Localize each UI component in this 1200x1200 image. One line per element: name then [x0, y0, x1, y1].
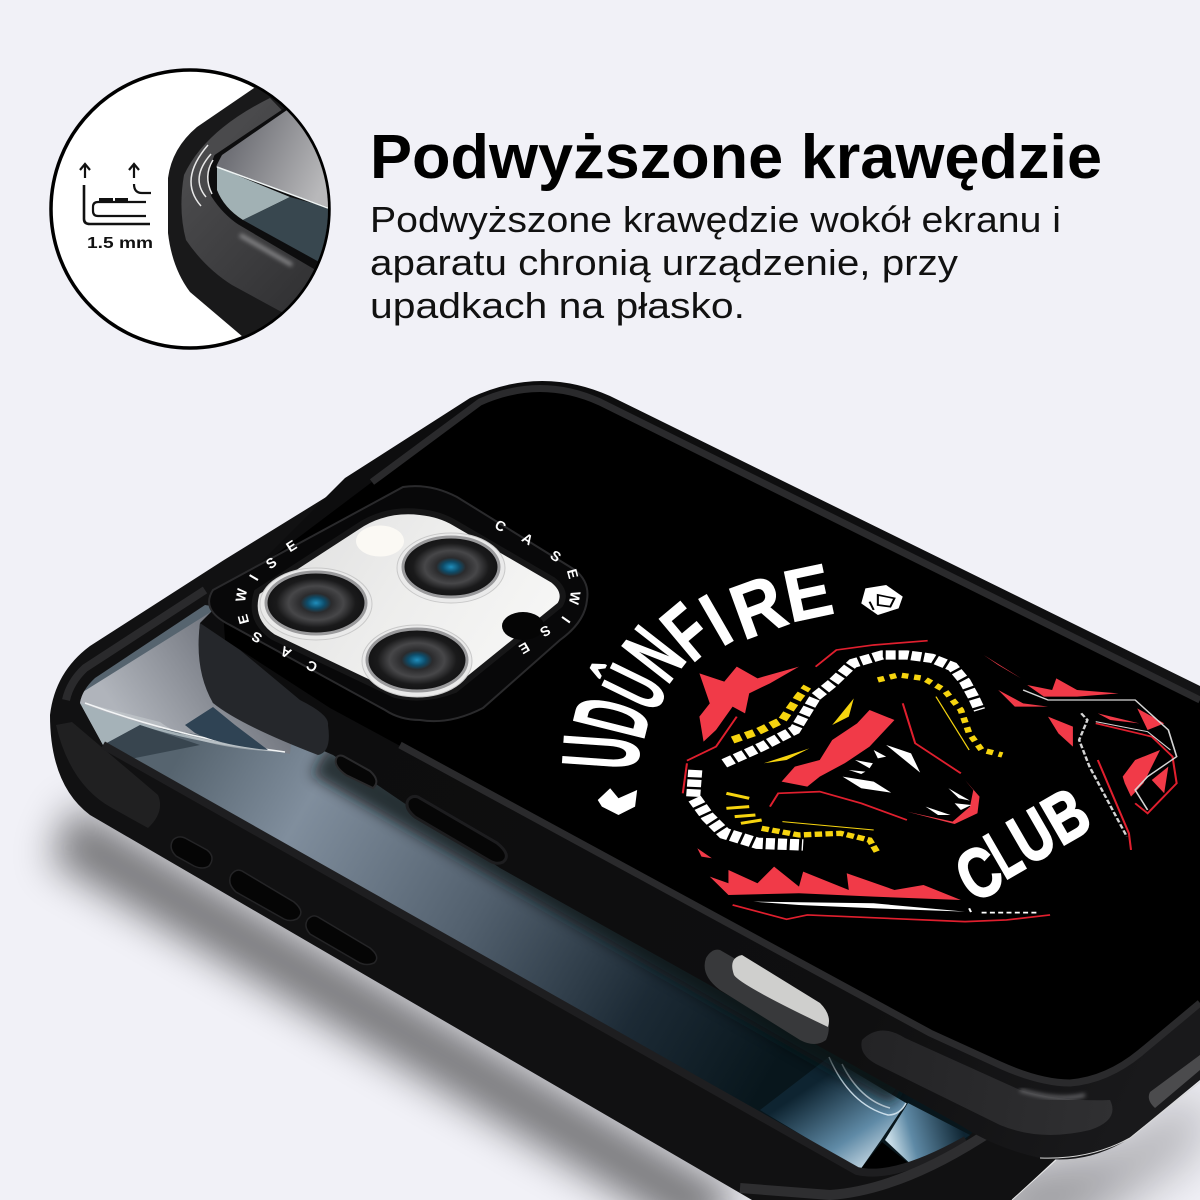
CASEWISE ring lettering: A [277, 643, 294, 662]
yellow scales [726, 675, 1002, 853]
CASEWISE ring lettering: E [564, 567, 582, 580]
dice emblem [861, 585, 903, 615]
camera window [255, 511, 563, 698]
face rim [372, 388, 1200, 1083]
CASEWISE ring lettering: C [492, 516, 509, 535]
lens bottom [362, 625, 472, 697]
right side light edge [1040, 1082, 1200, 1158]
front phone case with design [199, 381, 1200, 1160]
CASEWISE ring lettering: I [246, 572, 262, 583]
crown mark [598, 788, 637, 815]
CASEWISE ring lettering: E [283, 536, 300, 555]
artwork: UDÛNFIRE lettering: D [552, 688, 674, 747]
inset: case corner photo [168, 88, 328, 336]
artwork: UDÛNFIRE lettering: I [687, 578, 745, 661]
back phone button: volume down [306, 916, 377, 964]
back phone rim highlight [103, 745, 966, 1173]
artwork: CLUB lettering: L [974, 814, 1035, 894]
lidar hole [502, 612, 544, 640]
label: 1.5 mm: 1.5 mm [87, 235, 153, 252]
front phone shadow on screen [320, 760, 900, 1090]
CASEWISE ring lettering: C [303, 657, 320, 676]
artwork: CLUB lettering: C [944, 830, 1015, 917]
back phone button: volume up [230, 870, 301, 920]
CASEWISE ring lettering: I [558, 614, 574, 626]
description text: aparatu chronią urządzenie, przy [370, 242, 958, 283]
lens right [397, 533, 505, 603]
description text: Podwyższone krawędzie wokół ekranu i [370, 199, 1061, 240]
corner highlight [1020, 1090, 1085, 1098]
back phone port edge [1012, 1160, 1056, 1200]
artwork: UDÛNFIRE lettering: Û [584, 652, 686, 722]
white vertebrae [693, 655, 980, 845]
artwork: UDÛNFIRE lettering: E [777, 549, 839, 639]
callout: raised edge inset circle [51, 60, 340, 360]
back phone lower corner sheen [740, 1135, 985, 1195]
sword tip [969, 908, 1038, 913]
artwork: UDÛNFIRE lettering [539, 549, 839, 772]
right side speaker detail [1149, 1055, 1200, 1108]
artwork: CLUB lettering [944, 773, 1103, 917]
artwork: dragon emblem [598, 585, 1177, 922]
CASEWISE ring lettering: W [232, 586, 250, 603]
back phone screen [80, 605, 972, 1168]
silver button [732, 955, 829, 1027]
silver button recess [705, 950, 829, 1044]
back phone top rim sheen [66, 590, 205, 700]
icon: white signal arcs [191, 145, 213, 206]
red flames around the dragon [697, 655, 1168, 900]
dragon teeth [843, 745, 971, 815]
phone shadow: right corner [960, 1090, 1200, 1200]
CASEWISE ring lettering: S [537, 622, 554, 641]
artwork: CLUB lettering: B [1030, 773, 1103, 860]
artwork: UDÛNFIRE lettering: F [645, 587, 729, 677]
CASEWISE ring lettering: S [263, 554, 280, 572]
title: Podwyższone krawędzie [370, 123, 1102, 192]
camera bump base [199, 623, 329, 755]
corner carbon patch [861, 1030, 1112, 1135]
red linework [683, 641, 1177, 922]
phone shadow: lower edge [50, 805, 740, 1200]
front phone bezel [199, 381, 1200, 1160]
description text [370, 199, 1061, 326]
CASEWISE ring lettering: S [249, 628, 265, 647]
snake and dagger [1023, 690, 1177, 837]
artwork: UDÛNFIRE lettering: N [605, 611, 703, 697]
back phone case [50, 470, 1060, 1200]
CASEWISE ring lettering: E [234, 613, 252, 626]
sword [753, 902, 965, 912]
artwork: UDÛNFIRE lettering: R [719, 557, 797, 656]
front phone button: mute [336, 756, 376, 788]
front phone button: side [407, 796, 506, 863]
back phone button: action [171, 837, 212, 868]
screen glow rays [760, 1057, 906, 1170]
artwork: CLUB lettering: U [996, 793, 1068, 880]
artwork: UDÛNFIRE lettering: U [539, 732, 663, 772]
CASEWISE ring lettering: S [547, 547, 564, 565]
icon: raised edge diagram [80, 164, 151, 224]
camera bump [209, 486, 588, 721]
CASEWISE ring lettering: W [566, 590, 584, 607]
flash [356, 526, 404, 556]
CASEWISE ring lettering: A [519, 529, 536, 548]
lens left [260, 568, 372, 640]
CASEWISE ring lettering [232, 516, 584, 676]
yellow bolts [764, 698, 854, 763]
description text: upadkach na płasko. [370, 285, 745, 326]
black face [222, 388, 1200, 1083]
CASEWISE ring lettering: E [516, 639, 533, 658]
